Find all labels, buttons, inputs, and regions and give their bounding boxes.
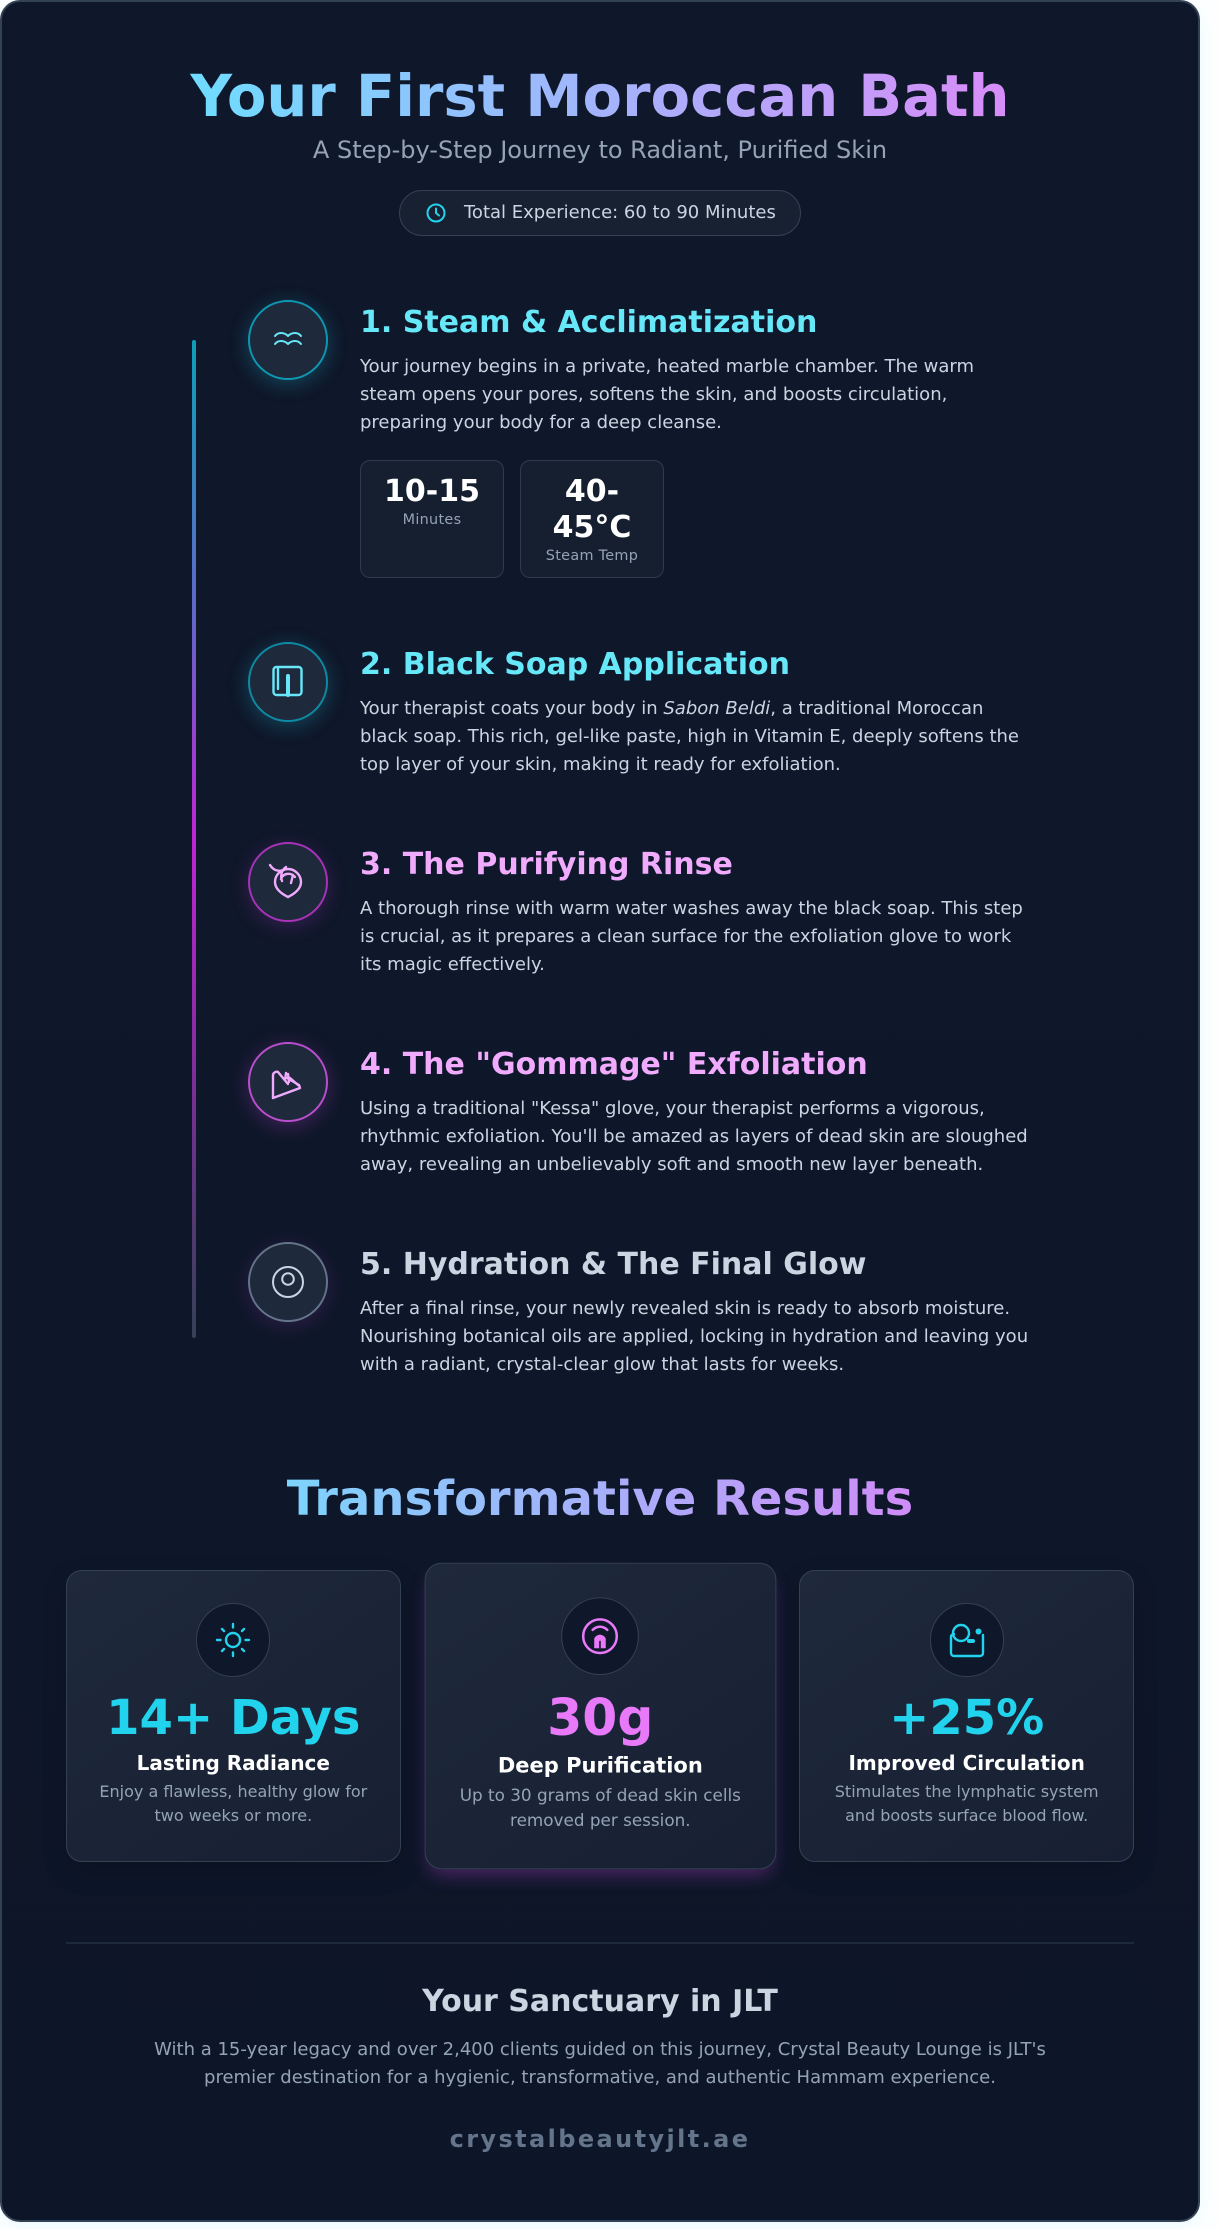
stat description: two weeks or more.: [154, 1806, 312, 1825]
pill text: Total Experience: 60 to 90 Minutes: [464, 202, 776, 223]
stat description: [459, 1785, 741, 1830]
icon: purification dome: [561, 1597, 639, 1675]
stat description: [99, 1782, 368, 1825]
step 5 text: with a radiant, crystal-clear glow that lasts for weeks.: [360, 1354, 844, 1375]
step 2 text: [360, 698, 1019, 775]
step 4 text: [360, 1098, 1028, 1175]
step 1 text: [360, 356, 974, 433]
step 2 text: Your therapist coats your body in Sabon Beldi, a traditional Moroccan: [360, 698, 983, 719]
results heading: Transformative Results: [287, 1471, 913, 1527]
step 1 text: preparing your body for a deep cleanse.: [360, 412, 722, 433]
icon: steam waves: [248, 300, 328, 380]
stat value: +25%: [889, 1690, 1044, 1746]
step 4 text: rhythmic exfoliation. You'll be amazed as layers of dead skin are sloughed: [360, 1126, 1028, 1147]
step 3 text: its magic effectively.: [360, 954, 545, 975]
step 2: [240, 638, 1019, 775]
stat label: Improved Circulation: [848, 1751, 1085, 1775]
stat label: Lasting Radiance: [137, 1751, 330, 1775]
stat: temperature: Steam Temp: [546, 548, 638, 564]
step 3 text: [360, 898, 1023, 975]
stat description: Enjoy a flawless, healthy glow for: [99, 1782, 367, 1801]
panel: deep purification: [424, 1563, 776, 1869]
website: crystalbeautyjlt.ae: [450, 2125, 750, 2153]
stat value: 14+ Days: [106, 1690, 360, 1746]
stat description: [835, 1782, 1099, 1825]
stat description: and boosts surface blood flow.: [845, 1806, 1088, 1825]
step 3: [242, 840, 1023, 975]
icon: kessa glove: [248, 1042, 328, 1122]
stat: minutes: Minutes: [403, 512, 461, 528]
title: Your First Moroccan Bath: [190, 63, 1010, 130]
step 5 text: After a final rinse, your newly revealed skin is ready to absorb moisture.: [360, 1298, 1010, 1319]
stat description: Stimulates the lymphatic system: [835, 1782, 1099, 1801]
footer text: With a 15-year legacy and over 2,400 clients guided on this journey, Crystal Beauty Lounge is JLT's: [154, 2039, 1046, 2060]
footer text: premier destination for a hygienic, transformative, and authentic Hammam experience.: [204, 2067, 996, 2088]
step 2 text: black soap. This rich, gel-like paste, high in Vitamin E, deeply softens the: [360, 726, 1019, 747]
subtitle: A Step-by-Step Journey to Radiant, Purified Skin: [313, 136, 887, 164]
stat: temperature: 45°C: [553, 510, 631, 545]
step 1 heading: 1. Steam & Acclimatization: [360, 304, 817, 340]
step 3 text: is crucial, as it prepares a clean surface for the exfoliation glove to work: [360, 926, 1011, 947]
stat value: 30g: [547, 1689, 653, 1748]
panel: improved circulation: [799, 1570, 1134, 1862]
icon: glow rings: [248, 1242, 328, 1322]
step 5 heading: 5. Hydration & The Final Glow: [360, 1246, 866, 1282]
panel: lasting radiance: [66, 1570, 401, 1862]
step 2 heading: 2. Black Soap Application: [360, 647, 790, 682]
stat: temperature: 40-: [565, 474, 619, 509]
step 1: [240, 296, 974, 578]
stat label: Deep Purification: [497, 1753, 702, 1778]
step 4 text: away, revealing an unbelievably soft and smooth new layer beneath.: [360, 1154, 983, 1175]
step 2 text: top layer of your skin, making it ready for exfoliation.: [360, 754, 841, 775]
header: [190, 63, 1010, 236]
icon: circulation: [930, 1603, 1004, 1677]
stat description: removed per session.: [510, 1810, 690, 1830]
step 3 heading: 3. The Purifying Rinse: [360, 847, 733, 882]
footer text: [154, 2039, 1046, 2088]
stat: minutes: 10-15: [384, 474, 480, 509]
total time pill: [399, 190, 801, 236]
step 1 text: steam opens your pores, softens the skin, and boosts circulation,: [360, 384, 947, 405]
step 4 heading: 4. The "Gommage" Exfoliation: [360, 1047, 868, 1082]
step 5 text: [360, 1298, 1028, 1375]
footer: [66, 1942, 1134, 2162]
step 5: [244, 1242, 1028, 1375]
stat: temperature: [520, 460, 664, 578]
step 1 text: Your journey begins in a private, heated marble chamber. The warm: [360, 356, 974, 377]
icon: clock: [426, 204, 446, 222]
timeline line: [192, 340, 196, 1338]
icon: soap: [248, 642, 328, 722]
step 4: [240, 1038, 1028, 1175]
stat: minutes: [360, 460, 504, 578]
stat description: Up to 30 grams of dead skin cells: [459, 1785, 741, 1805]
footer heading: Your Sanctuary in JLT: [422, 1984, 778, 2019]
icon: sun: [196, 1603, 270, 1677]
step 4 text: Using a traditional "Kessa" glove, your therapist performs a vigorous,: [360, 1098, 985, 1119]
step 3 text: A thorough rinse with warm water washes away the black soap. This step: [360, 898, 1023, 919]
step 5 text: Nourishing botanical oils are applied, locking in hydration and leaving you: [360, 1326, 1028, 1347]
icon: water drop: [248, 842, 328, 922]
